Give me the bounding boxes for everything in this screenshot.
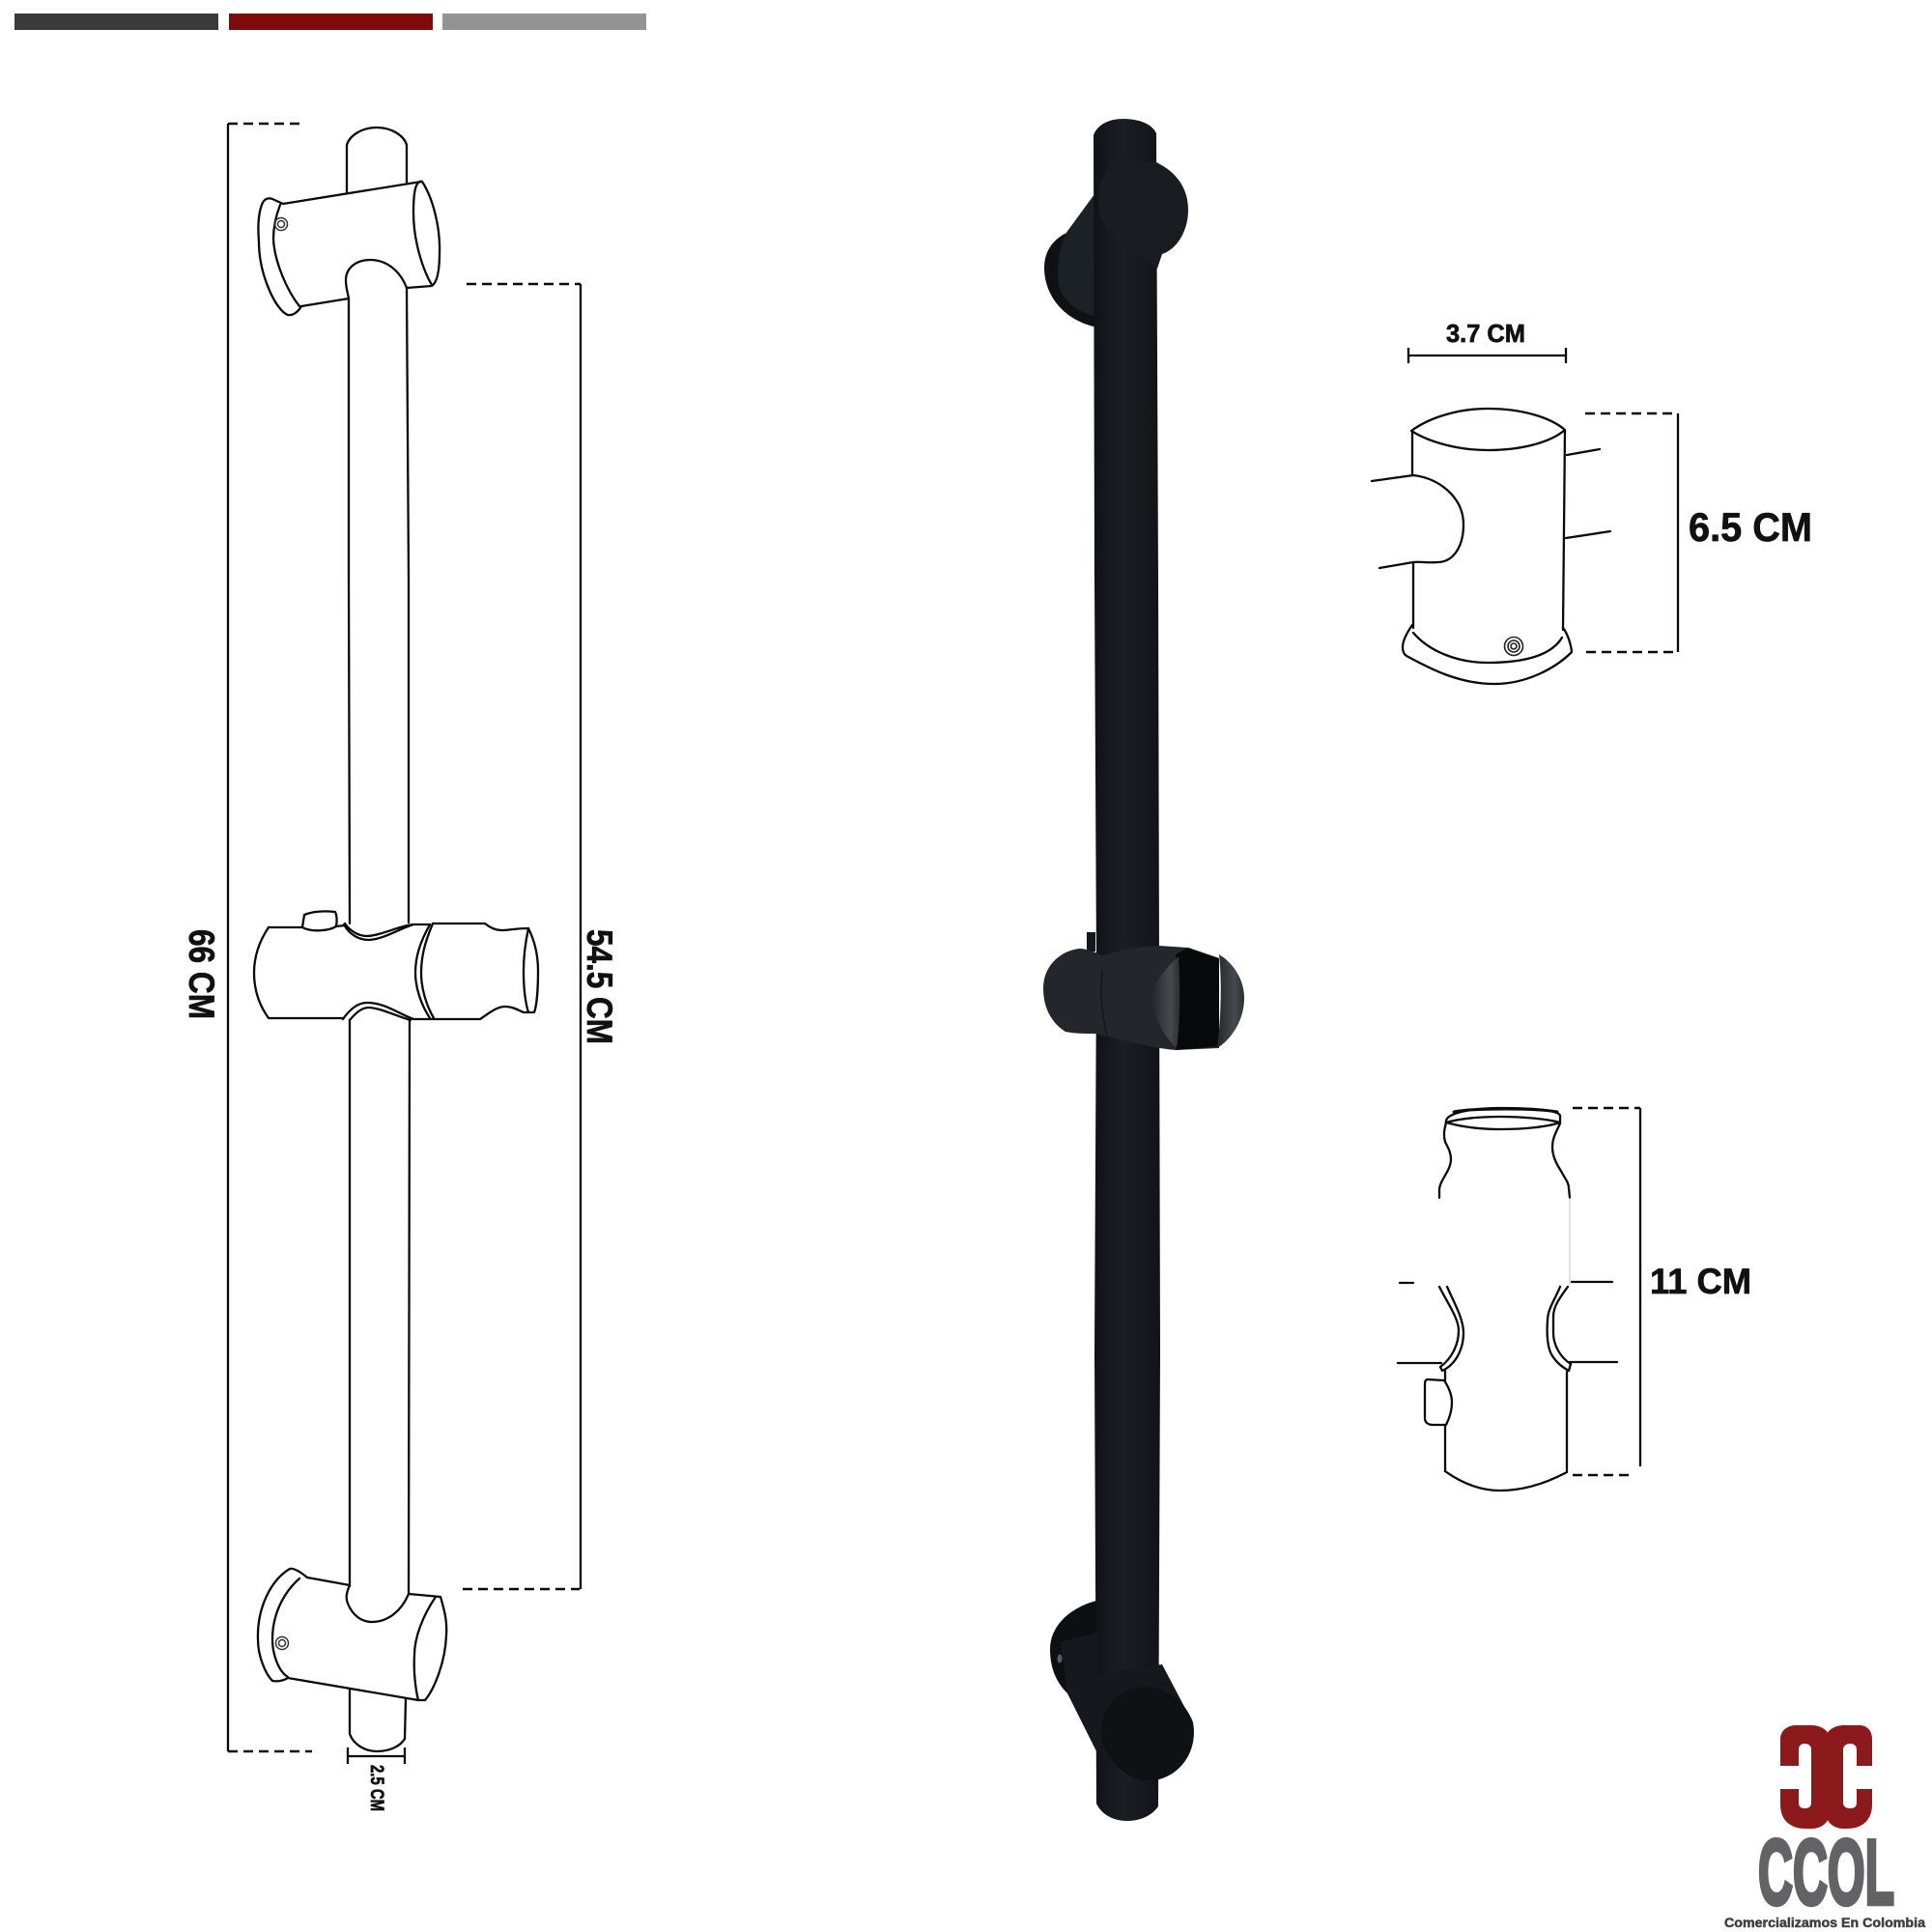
central slider [254,911,538,1020]
slider side drawing [1398,1108,1617,1491]
slider cavity [1176,948,1219,1050]
bottom bracket body [1061,1633,1190,1768]
logo: CCOL [1724,1725,1926,1930]
rod [1094,119,1160,1821]
icon: bottom bracket screw [276,1636,288,1650]
bottom bracket screw [1057,1654,1063,1663]
product photo: black shower bar [1043,119,1244,1821]
icon: detail screw [1505,638,1522,655]
slider left lens [1152,956,1179,1048]
rod outline [347,128,410,1751]
logo tagline: Comercializamos En Colombia [1724,1916,1926,1930]
header colour bars [14,14,646,30]
top bracket disc [1098,159,1188,269]
dimension: 3.7 CM: 3.7 CM [1446,319,1525,348]
bottom bracket disc [1101,1687,1194,1780]
top wall bracket [258,182,440,315]
dimension: 11 CM: 11 CM [1650,1262,1751,1301]
slider seam [1101,971,1107,1036]
top bracket body [1058,193,1101,319]
bottom bracket flange [1050,1601,1097,1700]
dimension: 2.5 CM: 2.5 CM [366,1765,386,1811]
panel: slider detail [1398,1108,1751,1491]
dimension: 6.5 CM: 6.5 CM [1689,504,1812,550]
panel: full bar line drawing with dimensions [182,124,619,1811]
icon: top bracket screw [274,218,288,230]
slider body [1043,946,1219,1050]
dimension: 2.5 CM [348,1747,405,1811]
slider right lens [1217,954,1244,1048]
top bracket flange [1044,232,1101,327]
logo mark [1779,1725,1873,1829]
bottom wall bracket [258,1569,446,1700]
dimension: 66 CM: 66 CM [182,929,221,1019]
dimension: 3.7 CM [1408,319,1566,363]
panel: wall bracket detail [1372,319,1812,684]
bracket cylinder drawing [1372,409,1610,684]
slider button [1087,932,1095,952]
dimension: 54.5 CM: 54.5 CM [580,929,619,1044]
